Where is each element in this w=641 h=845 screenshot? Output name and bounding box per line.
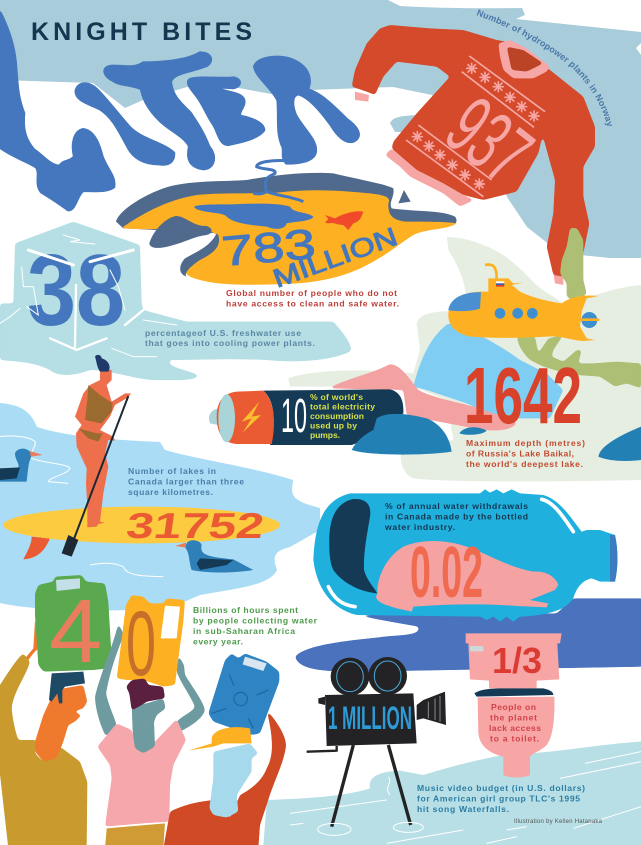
cuffs bbox=[355, 92, 563, 285]
green can handle bbox=[56, 578, 80, 591]
left person shirt bbox=[0, 653, 87, 845]
paddle boarder bbox=[0, 355, 280, 577]
blue lake on puddle bbox=[194, 204, 313, 229]
puddle shadow bbox=[116, 173, 457, 240]
periscope bbox=[485, 265, 497, 278]
caption: cooling bbox=[145, 328, 315, 348]
fin bbox=[23, 537, 50, 559]
pale water lower right bbox=[263, 742, 641, 845]
caption: bottled water: in Canada made by the bottled bbox=[385, 512, 528, 522]
caption: TLC: for American girl group TLC's 1995 bbox=[417, 794, 580, 804]
caption: toilet: People on bbox=[491, 702, 536, 712]
middle person shirt bbox=[97, 719, 186, 827]
stat: 1 million: 1 MILLION bbox=[328, 700, 412, 736]
letter A bbox=[77, 84, 173, 164]
rock by battery bbox=[352, 414, 452, 455]
toilet bbox=[466, 633, 562, 777]
portholes bbox=[495, 308, 538, 319]
caption: toilet: lack access bbox=[489, 723, 541, 733]
crank bbox=[307, 746, 337, 752]
caption: pumps: % of world's bbox=[310, 392, 363, 402]
caption: bottled water: % of annual water withdrawals bbox=[385, 501, 528, 511]
white water squiggles bbox=[0, 436, 163, 577]
bottle bbox=[313, 489, 617, 622]
battery cap bbox=[209, 408, 218, 425]
number 783: 783 bbox=[220, 220, 317, 275]
camera body and lens bbox=[318, 692, 446, 746]
lightning bolt bbox=[242, 402, 261, 433]
collar bbox=[498, 40, 550, 78]
puddle yellow bbox=[123, 190, 457, 285]
battery bbox=[209, 389, 403, 445]
rock bbox=[149, 216, 212, 248]
word WATER bbox=[0, 13, 358, 209]
caption: pumps: total electricity bbox=[310, 402, 375, 412]
blue can marks bbox=[212, 675, 268, 728]
stat: 1/3: 1/3 bbox=[492, 640, 542, 681]
ice cube highlights bbox=[0, 235, 177, 357]
flush handle bbox=[470, 646, 483, 651]
dark blue water bbox=[295, 598, 641, 672]
caption: toilet: to a toilet. bbox=[490, 734, 539, 744]
swimsuit bbox=[78, 385, 113, 442]
pale spot beside sweater bbox=[390, 115, 417, 132]
middle person hair bbox=[126, 678, 165, 711]
second duck body bbox=[185, 540, 253, 572]
light blue mountain bbox=[413, 323, 563, 418]
right rock bbox=[598, 427, 641, 461]
caption: TLC bbox=[417, 783, 585, 814]
cap bbox=[188, 727, 252, 751]
surfboard bbox=[3, 507, 280, 543]
caption: cooling: that goes into cooling power plants. bbox=[145, 338, 315, 348]
left person face bbox=[35, 685, 87, 762]
pale blue water around ice cube bbox=[0, 222, 351, 380]
wave lines bbox=[290, 752, 641, 843]
left duck body bbox=[0, 449, 32, 482]
green can bbox=[35, 575, 112, 672]
small rock bbox=[459, 427, 487, 435]
yellow can window bbox=[161, 606, 180, 638]
sweater bbox=[352, 25, 595, 285]
left person hair bbox=[49, 672, 85, 703]
caption: lakes: Canada larger than three bbox=[128, 476, 244, 486]
stat: 4: 4 bbox=[49, 582, 102, 682]
number 937: 937 bbox=[430, 79, 549, 201]
caption: Lake Baikal: Maximum depth (metres) bbox=[466, 438, 585, 448]
caption: bottled water: water industry. bbox=[384, 522, 455, 532]
letter T bbox=[105, 53, 213, 168]
word MILLION: MILLION bbox=[269, 221, 401, 294]
bottle highlights bbox=[328, 499, 573, 607]
caption: pumps bbox=[310, 392, 375, 440]
submarine scene bbox=[328, 228, 641, 430]
russian flag bbox=[496, 281, 504, 287]
caption: pumps: consumption bbox=[310, 411, 364, 421]
left person hand bbox=[25, 620, 43, 660]
hair bbox=[95, 355, 110, 372]
lens ribs bbox=[428, 696, 440, 722]
paddle bbox=[72, 396, 128, 545]
paddle blade bbox=[62, 535, 78, 557]
curved caption: hydropower: Number of hydropower plants in Norway bbox=[476, 10, 612, 126]
battery end face bbox=[218, 394, 235, 442]
caption: collecting water: by people collecting water bbox=[193, 616, 318, 626]
caption: pumps: used up by bbox=[310, 420, 357, 430]
lower seaweed bbox=[517, 335, 641, 388]
stat: 1642: 1642 bbox=[464, 351, 582, 440]
bottle glass bbox=[313, 489, 617, 622]
sweater snowflakes bbox=[412, 63, 539, 189]
caption: lakes bbox=[128, 466, 244, 497]
letter E bbox=[189, 78, 263, 144]
reel rings bbox=[337, 661, 401, 692]
bottle label dark bbox=[329, 499, 377, 593]
ice cube stat bbox=[0, 235, 177, 357]
toilet bowl bbox=[478, 697, 554, 777]
toilet seat bbox=[474, 688, 553, 697]
caption: collecting water: in sub-Saharan Africa bbox=[193, 626, 295, 636]
middle person pants bbox=[105, 823, 165, 845]
title: KNIGHT BITES bbox=[31, 18, 252, 46]
second duck beak bbox=[175, 543, 186, 548]
seal bbox=[376, 541, 558, 612]
people carrying water bbox=[0, 575, 286, 845]
caption: Lake Baikal: of Russia's Lake Baikal, bbox=[466, 448, 574, 458]
caption: TLC: hit song Waterfalls. bbox=[417, 804, 509, 814]
pale blue sky background bbox=[0, 0, 641, 258]
caption: pumps: pumps. bbox=[310, 430, 340, 440]
caption: Lake Baikal: the world's deepest lake. bbox=[466, 459, 583, 469]
second duck wing bbox=[197, 558, 233, 570]
reels bbox=[331, 657, 407, 696]
film camera bbox=[307, 657, 446, 835]
caption: 783 million: have access to clean and safe water. bbox=[226, 298, 399, 308]
caption: bottled water bbox=[384, 501, 528, 532]
blue rocks bbox=[352, 414, 641, 461]
toilet tank bbox=[466, 633, 562, 688]
caption: collecting water: every year. bbox=[193, 636, 243, 646]
middle person face bbox=[132, 698, 166, 753]
stat: 0.02: 0.02 bbox=[410, 533, 483, 613]
water stream bbox=[253, 161, 303, 202]
caption: TLC: Music video budget (in U.S. dollars) bbox=[417, 783, 585, 793]
yellow can bbox=[117, 595, 185, 687]
caption: collecting water bbox=[193, 605, 318, 646]
caption: toilet: the planet bbox=[490, 712, 537, 722]
battery body bbox=[263, 389, 403, 445]
puddle bbox=[116, 161, 457, 285]
number 38: 38 bbox=[27, 235, 125, 347]
blue can handle bbox=[243, 657, 267, 671]
right person shirt bbox=[163, 710, 286, 845]
sweater body bbox=[352, 25, 595, 277]
bottle mouth ring bbox=[610, 535, 617, 582]
right person face bbox=[209, 743, 258, 818]
letter R bbox=[255, 58, 358, 163]
caption: 783 million bbox=[226, 288, 399, 308]
battery orange end bbox=[217, 391, 274, 444]
caption: collecting water: Billions of hours spent bbox=[193, 605, 298, 615]
text: 10 bbox=[281, 390, 307, 443]
caption: lakes: square kilometres. bbox=[128, 487, 213, 497]
caption: cooling: percentageof U.S. freshwater use bbox=[145, 328, 301, 338]
drop bbox=[398, 190, 411, 203]
stat: 783 million bbox=[220, 220, 401, 294]
tripod bbox=[332, 745, 411, 827]
propeller bbox=[580, 312, 599, 328]
left duck wing bbox=[0, 467, 20, 480]
blue can bbox=[208, 653, 279, 735]
light blue lake bbox=[0, 403, 320, 611]
caption: lakes: Number of lakes in bbox=[128, 466, 216, 476]
submarine hull bbox=[448, 278, 598, 341]
fish bbox=[325, 211, 363, 230]
submarine window bbox=[448, 292, 481, 311]
pale green backdrop behind submarine bbox=[288, 237, 641, 481]
puddle lower shadow bbox=[180, 233, 219, 277]
middle person arms bbox=[95, 623, 205, 737]
ripples bbox=[318, 822, 423, 835]
caption: toilet bbox=[489, 702, 541, 744]
caption: Lake Baikal bbox=[466, 438, 585, 469]
stat: 0: 0 bbox=[126, 593, 156, 695]
pink mountain bbox=[328, 364, 517, 430]
stat: 31752: 31752 bbox=[124, 505, 267, 546]
woman skin bbox=[75, 368, 131, 527]
collar inner bbox=[507, 47, 543, 72]
caption: 783 million: Global number of people who do not bbox=[226, 288, 397, 298]
upper seaweed bbox=[560, 228, 587, 303]
letter W bbox=[0, 13, 114, 209]
sweater stripes bbox=[406, 56, 545, 197]
left duck beak bbox=[30, 451, 43, 457]
hem bbox=[385, 148, 474, 207]
credit: Illustration by Kellen Hatanaka bbox=[514, 819, 603, 825]
